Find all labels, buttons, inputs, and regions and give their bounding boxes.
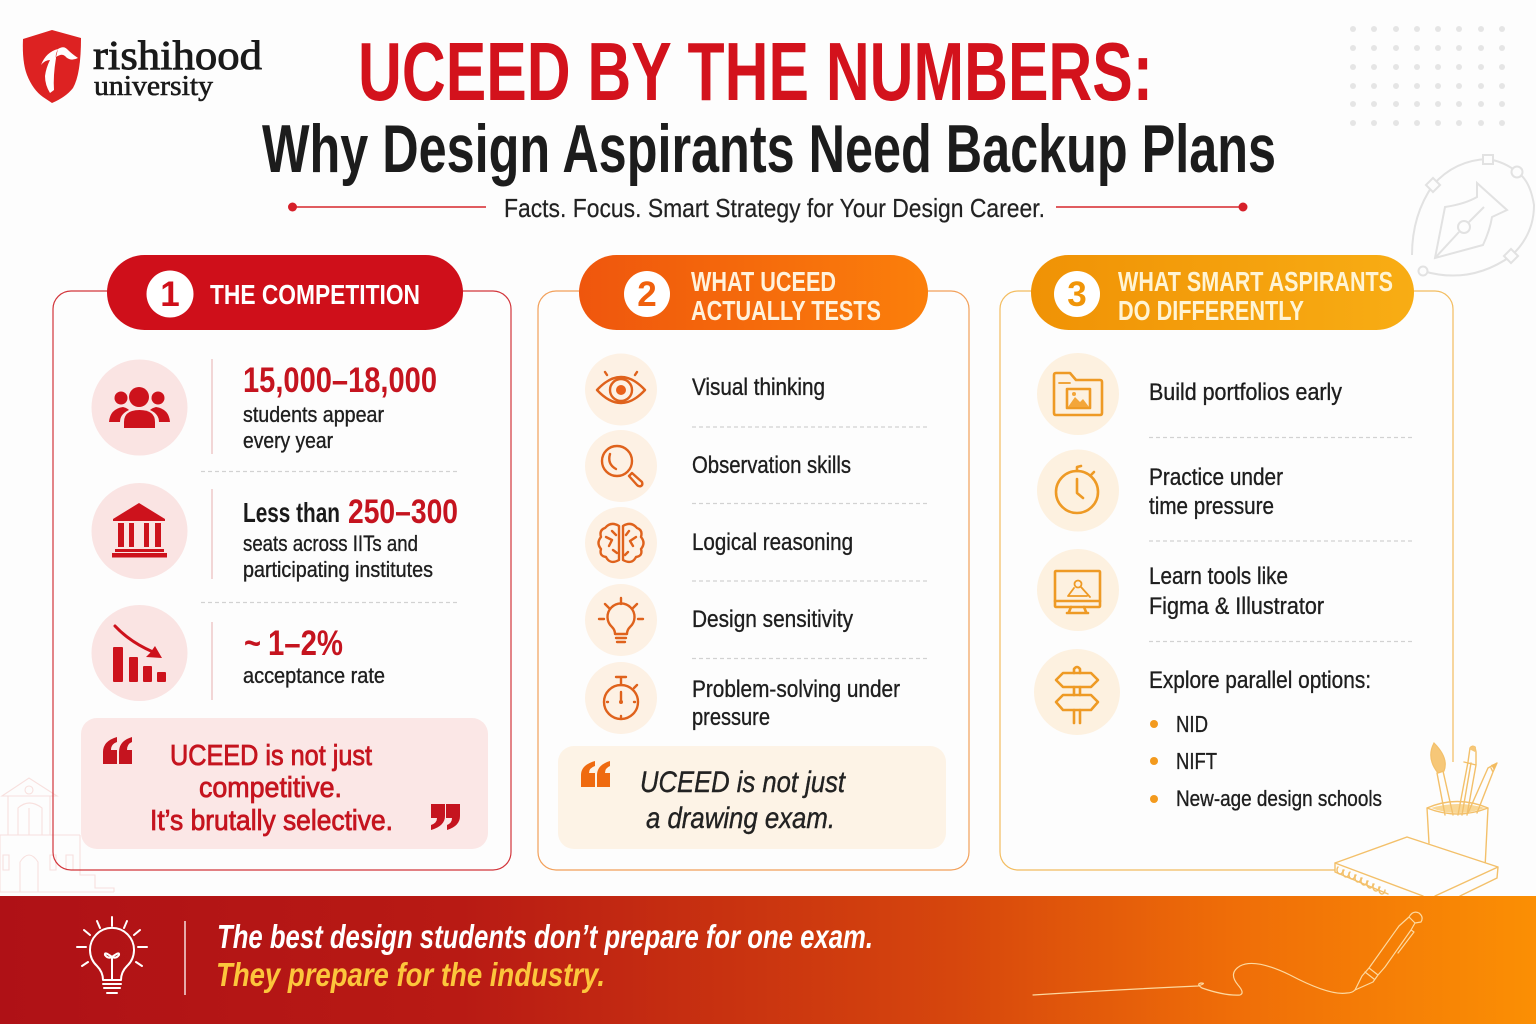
callout: not just a drawing exam: UCEED is not just (640, 766, 846, 799)
item: design sensitivity: Design sensitivity (692, 606, 853, 633)
footer statement: The best design students don’t prepare for one exam. (217, 918, 873, 955)
item: learn tools: Figma & Illustrator (1149, 593, 1324, 620)
decorative dot grid (1350, 26, 1505, 126)
callout: brutally selective: UCEED is not just (170, 740, 372, 772)
logo: rishihood university (23, 30, 262, 103)
stat: number of students: every year (243, 428, 333, 453)
item: learn tools (1149, 563, 1324, 620)
stat: number of students: students appear (243, 402, 384, 427)
callout: brutally selective: competitive. (199, 772, 342, 804)
stat: seats: participating institutes (243, 557, 433, 582)
panel 2 header pill: 2 (637, 275, 657, 314)
tagline with rules: Facts. Focus. Smart Strategy for Your Design Career. (504, 193, 1045, 223)
panel: what smart aspirants do (1000, 255, 1453, 870)
logo: rishihood university: university (94, 71, 213, 102)
decorative campus building line art (0, 778, 114, 892)
illustration: notebook and pencil cup (1335, 743, 1498, 897)
illustration: pen with flourish (1033, 912, 1422, 995)
icon: portfolio folder (1037, 353, 1119, 435)
title: UCEED BY THE NUMBERS: (358, 25, 1153, 118)
panel 2 header pill: WHAT UCEED (691, 266, 836, 297)
item: visual thinking: Visual thinking (692, 374, 825, 401)
stat: seats: seats across IITs and (243, 531, 418, 556)
panel 2 header pill (579, 255, 928, 330)
logo: rishihood university: rishihood (93, 32, 262, 78)
stat: number of students (243, 361, 437, 453)
item: build portfolios early: Build portfolios early (1149, 379, 1342, 406)
item: problem-solving under pressure (692, 676, 900, 731)
callout: brutally selective: It’s brutally selective. (150, 805, 393, 837)
item: practice under time pressure (1149, 464, 1283, 520)
item: problem-solving under pressure: Problem-solving under (692, 676, 900, 703)
item: explore parallel options: NID (1176, 711, 1208, 737)
icon: stopwatch (585, 662, 657, 734)
icon: design monitor (1037, 549, 1119, 631)
tagline with rules (288, 193, 1248, 223)
callout: not just a drawing exam: a drawing exam. (646, 802, 835, 835)
stat: seats (243, 493, 458, 582)
icon: eye (585, 354, 657, 426)
item: practice under time pressure: Practice under (1149, 464, 1283, 491)
footer banner (0, 896, 1536, 1024)
callout: not just a drawing exam (558, 746, 946, 849)
icon: magnifier (585, 430, 657, 502)
item: observation skills: Observation skills (692, 452, 851, 479)
stat: acceptance rate: acceptance rate (243, 663, 385, 688)
stat: acceptance rate (243, 624, 385, 688)
icon: clock (1037, 450, 1119, 532)
stat: seats: Less than (243, 497, 340, 528)
panel 1 header pill: 1 (160, 275, 180, 314)
panel 3 header pill: DO DIFFERENTLY (1118, 295, 1304, 326)
icon: pen tool emblem (1412, 155, 1534, 276)
stat: acceptance rate: 1–2% (268, 624, 343, 663)
item: explore parallel options: NIFT (1176, 748, 1217, 774)
footer statement: They prepare for the industry. (216, 956, 605, 993)
icon: brain (585, 507, 657, 579)
panel: the competition (53, 255, 511, 870)
callout: brutally selective (81, 718, 488, 849)
panel 2 header pill: ACTUALLY TESTS (691, 295, 881, 326)
icon: signpost (1034, 649, 1120, 735)
item: explore parallel options (1149, 667, 1382, 811)
item: logical reasoning: Logical reasoning (692, 529, 853, 556)
item: explore parallel options: New-age design schools (1176, 786, 1382, 811)
item: explore parallel options: Explore parallel options: (1149, 667, 1371, 694)
panel 1 header pill: THE COMPETITION (210, 279, 420, 310)
stat: seats: 250–300 (348, 493, 458, 531)
icon: lightbulb (585, 584, 657, 656)
item: learn tools: Learn tools like (1149, 563, 1288, 590)
item: problem-solving under pressure: pressure (692, 704, 770, 731)
panel 3 header pill: WHAT SMART ASPIRANTS (1118, 266, 1393, 297)
stat: acceptance rate: ~ (244, 624, 261, 663)
item: practice under time pressure: time pressure (1149, 493, 1274, 520)
icon: falling bar chart (92, 605, 188, 701)
panel 1 header pill (107, 255, 463, 330)
footer statement (216, 918, 873, 993)
panel 3 header pill: 3 (1067, 275, 1087, 314)
stat: number of students: 15,000–18,000 (243, 361, 437, 400)
icon: students group (92, 360, 188, 456)
panel: what UCEED tests (538, 255, 969, 870)
panel 3 header pill (1031, 255, 1414, 330)
icon: footer lightbulb (77, 917, 147, 993)
icon: institute building (92, 483, 188, 579)
